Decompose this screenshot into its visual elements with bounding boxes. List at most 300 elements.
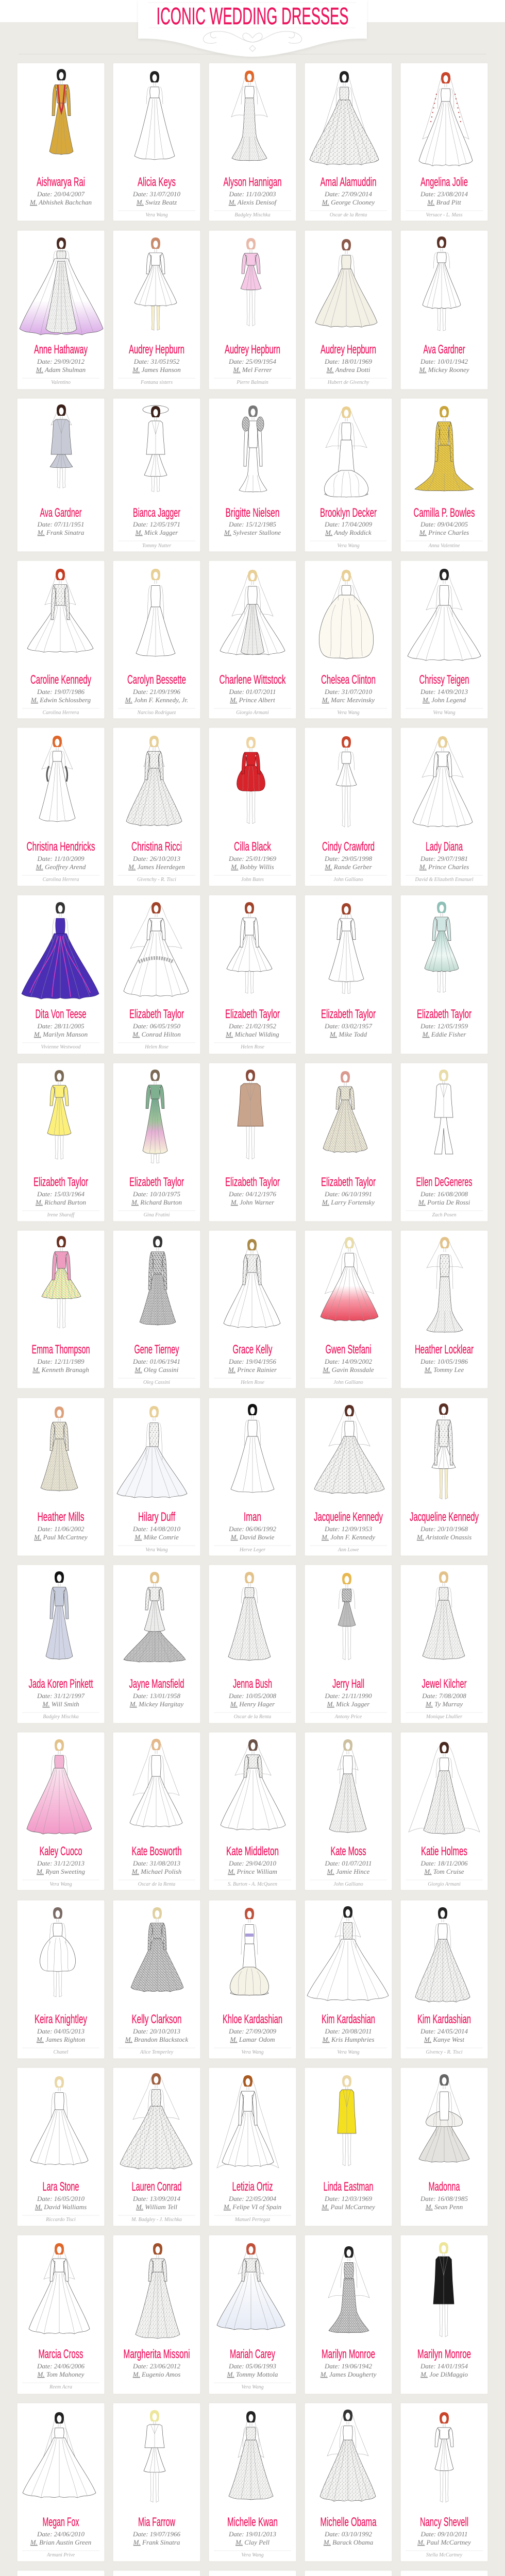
designer: Vera Wang bbox=[433, 710, 456, 716]
icon: dress bbox=[336, 736, 357, 827]
icon: dress bbox=[409, 1742, 480, 1834]
card: Kelly Clarkson bbox=[113, 1900, 200, 2059]
card: Amal Alamuddin bbox=[305, 63, 392, 221]
name: Brooklyn Decker bbox=[320, 506, 377, 520]
icon: dress bbox=[315, 239, 377, 327]
spouse: M. Tommy Mottola bbox=[227, 2370, 278, 2378]
card: Emma Thompson bbox=[17, 1230, 105, 1388]
card: Lauren Conrad bbox=[113, 2067, 200, 2226]
card: Michelle Kwan bbox=[209, 2403, 296, 2562]
spouse: M. Andrea Dotti bbox=[326, 366, 371, 374]
card: Bianca Jagger bbox=[113, 398, 200, 552]
name: Ava Gardner bbox=[424, 343, 465, 357]
date: Date: 28/11/2005 bbox=[37, 1022, 85, 1030]
card: Ava Gardner 1942 bbox=[400, 230, 488, 389]
name: Kate Bosworth bbox=[132, 1844, 181, 1858]
date: Date: 12/11/1989 bbox=[37, 1358, 85, 1365]
name: Lauren Conrad bbox=[132, 2180, 181, 2194]
date: Date: 03/10/1992 bbox=[324, 2530, 373, 2538]
spouse: M. Paul McCartney bbox=[33, 1533, 88, 1541]
designer: Giorgio Armani bbox=[236, 710, 269, 716]
date: Date: 31/07/2010 bbox=[324, 688, 373, 696]
designer: Giorgio Armani bbox=[428, 1882, 461, 1887]
designer: Fontana sisters bbox=[140, 380, 173, 385]
spouse: M. Michael Polish bbox=[131, 1868, 181, 1875]
spouse: M. Frank Sinatra bbox=[133, 2538, 180, 2546]
card: Katie Holmes bbox=[400, 1732, 488, 1890]
date: Date: 20/10/1968 bbox=[420, 1525, 468, 1533]
date: Date: 07/11/1951 bbox=[37, 520, 85, 528]
icon: dress bbox=[221, 1739, 285, 1830]
designer: Armani Prive bbox=[46, 2552, 75, 2558]
name: Gene Tierney bbox=[134, 1343, 179, 1357]
name: Audrey Hepburn bbox=[225, 343, 280, 357]
name: Ava Gardner bbox=[40, 506, 81, 520]
card: Khloe Kardashian bbox=[209, 1900, 296, 2059]
designer: Hubert de Givenchy bbox=[327, 380, 369, 385]
date: Date: 12/05/1971 bbox=[132, 520, 180, 528]
date: Date: 31/08/2013 bbox=[132, 1859, 181, 1867]
card: Lady Diana bbox=[400, 727, 488, 886]
designer: David & Elizabeth Emanuel bbox=[414, 877, 474, 883]
spouse: M. Lamar Odom bbox=[229, 2036, 275, 2043]
date: Date: 25/01/1969 bbox=[228, 855, 277, 862]
card: Dita Von Teese bbox=[17, 895, 105, 1054]
designer: John Bates bbox=[241, 877, 264, 883]
card: Kim Kardashian 2014 bbox=[400, 1900, 488, 2059]
date: Date: 12/03/1969 bbox=[324, 2195, 373, 2202]
name: Madonna bbox=[429, 2180, 460, 2194]
date: Date: 16/08/2008 bbox=[420, 1190, 468, 1198]
card: Kaley Cuoco bbox=[17, 1732, 105, 1890]
spouse: M. Jamie Hince bbox=[327, 1868, 370, 1875]
spouse: M. Abhishek Bachchan bbox=[29, 198, 92, 206]
spouse: M. Mickey Hargitay bbox=[129, 1700, 184, 1708]
card: Michelle Obama bbox=[305, 2403, 392, 2562]
name: Elizabeth Taylor bbox=[33, 1175, 88, 1189]
spouse: M. Brian Austin Green bbox=[30, 2538, 91, 2546]
icon: dress bbox=[120, 2073, 192, 2169]
icon: dress bbox=[423, 1571, 465, 1659]
icon: dress bbox=[49, 69, 73, 155]
spouse: M. James Righton bbox=[36, 2036, 85, 2043]
icon: dress bbox=[136, 2243, 180, 2338]
date: Date: 23/06/2012 bbox=[132, 2362, 181, 2370]
icon: dress bbox=[131, 1907, 183, 1992]
designer: Vera Wang bbox=[337, 2049, 360, 2055]
designer: Versace - L. Mass bbox=[426, 212, 463, 218]
name: Marilyn Monroe bbox=[417, 2347, 471, 2361]
name: Elizabeth Taylor bbox=[129, 1175, 184, 1189]
card: Chrissy Teigen bbox=[400, 561, 488, 719]
name: Bianca Jagger bbox=[133, 506, 180, 520]
icon: dress bbox=[47, 1070, 71, 1159]
icon: dress bbox=[314, 1405, 384, 1494]
name: Gwen Stefani bbox=[326, 1343, 371, 1357]
date: Date: 11/10/2009 bbox=[37, 855, 85, 862]
icon: dress bbox=[434, 1070, 453, 1154]
spouse: M. James Hanson bbox=[132, 366, 181, 374]
name: Christina Ricci bbox=[131, 840, 182, 854]
spouse: M. Adam Shulman bbox=[36, 366, 86, 374]
header divider line bbox=[19, 54, 486, 55]
name: Marilyn Monroe bbox=[322, 2347, 375, 2361]
card: Kate Middleton bbox=[209, 1732, 296, 1890]
card: Caroline Kennedy bbox=[17, 561, 105, 719]
name: Kelly Clarkson bbox=[132, 2012, 181, 2026]
designer: John Galliano bbox=[333, 1380, 363, 1385]
spouse: M. Felipe VI of Spain bbox=[223, 2203, 281, 2211]
date: Date: 24/06/2010 bbox=[37, 2530, 85, 2538]
name: Aishwarya Rai bbox=[37, 175, 85, 189]
designer: Oleg Cassini bbox=[143, 1380, 170, 1385]
date: Date: 19/04/1956 bbox=[228, 1358, 277, 1365]
name: Kim Kardashian bbox=[417, 2012, 471, 2026]
name: Heather Mills bbox=[37, 1510, 85, 1524]
date: Date: 13/09/2014 bbox=[132, 2195, 181, 2202]
name: Letizia Ortiz bbox=[232, 2180, 273, 2194]
name: Caroline Kennedy bbox=[30, 673, 91, 687]
designer: Vivienne Westwood bbox=[41, 1044, 81, 1050]
icon: dress bbox=[29, 2243, 90, 2334]
icon: dress bbox=[117, 1406, 187, 1498]
designer: Givency - R. Tisci bbox=[426, 2049, 463, 2055]
icon: dress bbox=[324, 406, 368, 497]
spouse: M. Barack Obama bbox=[323, 2538, 374, 2546]
card: Christina Ricci bbox=[113, 727, 200, 886]
date: Date: 15/12/1985 bbox=[228, 520, 277, 528]
card: Jewel Kilcher bbox=[400, 1565, 488, 1723]
date: Date: 29/04/2010 bbox=[228, 1859, 277, 1867]
designer: Pierre Balmain bbox=[236, 380, 268, 385]
designer: Helen Rose bbox=[240, 1380, 264, 1385]
spouse: M. Geoffrey Arend bbox=[36, 863, 86, 871]
icon: dress bbox=[136, 569, 175, 656]
name: Chrissy Teigen bbox=[419, 673, 469, 687]
spouse: M. Will Smith bbox=[42, 1700, 79, 1708]
icon: dress bbox=[228, 1572, 271, 1660]
name: Cindy Crawford bbox=[322, 840, 375, 854]
name: Audrey Hepburn bbox=[321, 343, 376, 357]
spouse: M. Kris Humphries bbox=[322, 2036, 374, 2043]
designer: Vera Wang bbox=[241, 2552, 264, 2558]
date: Date: 06/05/1950 bbox=[132, 1022, 181, 1030]
card: Linda Eastman bbox=[305, 2067, 392, 2226]
card: Cindy Crawford bbox=[305, 727, 392, 886]
spouse: M. Mel Ferrer bbox=[233, 366, 272, 374]
icon: dress bbox=[415, 406, 474, 491]
icon: dress bbox=[224, 1239, 280, 1328]
icon: dress bbox=[124, 902, 189, 996]
name: Khloe Kardashian bbox=[223, 2012, 282, 2026]
icon: dress bbox=[237, 737, 265, 824]
name: Jacqueline Kennedy bbox=[314, 1510, 383, 1524]
spouse: M. Brandon Blackstock bbox=[125, 2036, 188, 2043]
spouse: M. John Warner bbox=[230, 1198, 275, 1206]
name: Elizabeth Taylor bbox=[129, 1007, 184, 1021]
name: Lara Stone bbox=[42, 2180, 79, 2194]
card: Elizabeth Taylor 1991 bbox=[305, 1063, 392, 1222]
card: Audrey Hepburn 1969 bbox=[305, 230, 392, 389]
name: Anne Hathaway bbox=[34, 343, 88, 357]
icon: dress bbox=[230, 1908, 269, 1995]
spouse: M. Ty Murray bbox=[425, 1700, 463, 1708]
date: Date: 10/01/1942 bbox=[420, 358, 468, 365]
name: Elizabeth Taylor bbox=[321, 1175, 376, 1189]
card: Cilla Black bbox=[209, 727, 296, 886]
card: Jerry Hall bbox=[305, 1565, 392, 1723]
designer: Helen Rose bbox=[240, 1044, 264, 1050]
header banner bbox=[138, 0, 367, 57]
spouse: M. Tom Mahoney bbox=[37, 2370, 85, 2378]
name: Elizabeth Taylor bbox=[417, 1007, 472, 1021]
designer: Carolina Herrera bbox=[43, 710, 79, 716]
card: Elizabeth Taylor 1959 bbox=[400, 895, 488, 1054]
white top band bbox=[0, 0, 505, 22]
name: Jayne Mansfield bbox=[129, 1677, 184, 1691]
designer: Helen Rose bbox=[144, 1044, 169, 1050]
card: Mia Farrow bbox=[113, 2403, 200, 2562]
name: Marcia Cross bbox=[38, 2347, 83, 2361]
card: Alyson Hannigan bbox=[209, 63, 296, 221]
icon: dress bbox=[338, 1573, 356, 1660]
card: Marilyn Monroe 1954 bbox=[400, 2235, 488, 2394]
icon: dress bbox=[425, 902, 459, 992]
icon: dress bbox=[239, 405, 267, 492]
card: Jayne Mansfield bbox=[113, 1565, 200, 1723]
name: Megan Fox bbox=[42, 2515, 79, 2529]
spouse: M. Paul McCartney bbox=[417, 2538, 471, 2546]
name: Keira Knightley bbox=[35, 2012, 87, 2026]
icon: dress bbox=[39, 736, 75, 822]
spouse: M. Ryan Sweeting bbox=[36, 1868, 85, 1875]
designer: Manuel Pertegaz bbox=[234, 2217, 270, 2223]
designer: John Galliano bbox=[333, 877, 363, 883]
date: Date: 09/04/2005 bbox=[420, 520, 468, 528]
spouse: M. John F. Kennedy bbox=[321, 1533, 375, 1541]
card: Kate Bosworth bbox=[113, 1732, 200, 1890]
card: Iman bbox=[209, 1398, 296, 1556]
name: Amal Alamuddin bbox=[321, 175, 376, 189]
name: Elizabeth Taylor bbox=[225, 1175, 280, 1189]
spouse: M. Tom Cruise bbox=[424, 1868, 464, 1875]
spouse: M. Richard Burton bbox=[35, 1198, 86, 1206]
date: Date: 03/02/1957 bbox=[324, 1022, 373, 1030]
designer: Anna Valentine bbox=[428, 543, 460, 549]
designer: M. Badgley - J. Mischka bbox=[131, 2217, 182, 2223]
date: Date: 31/07/2010 bbox=[132, 190, 181, 198]
name: Audrey Hepburn bbox=[129, 343, 184, 357]
card: Keira Knightley bbox=[17, 1900, 105, 2059]
spouse: M. William Tell bbox=[136, 2203, 177, 2211]
spouse: M. Sylvester Stallone bbox=[224, 529, 281, 536]
card: Kate Moss bbox=[305, 1732, 392, 1890]
date: Date: 12/09/1953 bbox=[324, 1525, 373, 1533]
icon: dress bbox=[20, 238, 103, 335]
date: Date: 12/05/1959 bbox=[420, 1022, 468, 1030]
date: Date: 29/05/1998 bbox=[324, 855, 373, 862]
designer: Vera Wang bbox=[241, 2384, 264, 2390]
icon: dress bbox=[220, 570, 285, 655]
spouse: M. Frank Sinatra bbox=[37, 529, 85, 536]
spouse: M. Rande Gerber bbox=[324, 863, 373, 871]
designer: Alice Temperley bbox=[140, 2049, 174, 2055]
date: Date: 14/09/2013 bbox=[420, 688, 468, 696]
card: Elizabeth Taylor 1952 bbox=[209, 895, 296, 1054]
designer: Monique Lhullier bbox=[426, 1714, 462, 1720]
designer: Zach Posen bbox=[432, 1212, 456, 1218]
designer: Givenchy - R. Tisci bbox=[137, 877, 176, 883]
card: Gene Tierney bbox=[113, 1230, 200, 1388]
card: Hilary Duff bbox=[113, 1398, 200, 1556]
icon: dress bbox=[231, 1404, 274, 1493]
card: Jenna Bush bbox=[209, 1565, 296, 1723]
spouse: M. Brad Pitt bbox=[427, 198, 461, 206]
name: Linda Eastman bbox=[324, 2180, 373, 2194]
icon: dress bbox=[419, 2074, 469, 2162]
spouse: M. Prince Charles bbox=[419, 863, 469, 871]
spouse: M. Richard Burton bbox=[131, 1198, 182, 1206]
card: Olivia Palermo bbox=[209, 2570, 296, 2576]
icon: dress bbox=[46, 1571, 73, 1659]
name: Christina Hendricks bbox=[27, 840, 95, 854]
spouse: M. Sean Penn bbox=[425, 2203, 463, 2211]
name: Jenna Bush bbox=[233, 1677, 272, 1691]
spouse: M. Joe DiMaggio bbox=[420, 2370, 468, 2378]
spouse: M. Mike Todd bbox=[329, 1030, 367, 1038]
date: Date: 09/10/2011 bbox=[420, 2530, 468, 2538]
designer: Valentino bbox=[51, 380, 71, 385]
date: Date: 16/05/2010 bbox=[37, 2195, 85, 2202]
name: Angelina Jolie bbox=[420, 175, 468, 189]
designer: Stella McCartney bbox=[426, 2552, 463, 2558]
date: Date: 31/12/1997 bbox=[37, 1692, 85, 1700]
icon: dress bbox=[319, 570, 374, 659]
card: Jada Koren Pinkett bbox=[17, 1565, 105, 1723]
spouse: M. Marilyn Manson bbox=[33, 1030, 88, 1038]
date: Date: 24/05/2014 bbox=[420, 2027, 468, 2035]
designer: Vera Wang bbox=[49, 1882, 72, 1887]
date: Date: 19/07/1966 bbox=[132, 2530, 181, 2538]
date: Date: 20/10/2013 bbox=[132, 2027, 181, 2035]
spouse: M. Eugenio Amos bbox=[132, 2370, 180, 2378]
name: Elizabeth Taylor bbox=[225, 1007, 280, 1021]
spouse: M. Mick Jagger bbox=[135, 529, 178, 536]
icon: dress bbox=[310, 71, 379, 165]
date: Date: 06/10/1991 bbox=[324, 1190, 372, 1198]
spouse: M. John F. Kennedy, Jr. bbox=[125, 696, 188, 704]
designer: Vera Wang bbox=[145, 212, 168, 218]
spouse: M. David Bowie bbox=[230, 1533, 275, 1541]
date: Date: 29/09/2012 bbox=[37, 358, 85, 365]
card: Camilla P. Bowles bbox=[400, 398, 488, 552]
name: Kaley Cuoco bbox=[39, 1844, 82, 1858]
date: Date: 14/09/2002 bbox=[324, 1358, 373, 1365]
icon: dress bbox=[27, 1739, 92, 1834]
date: Date: 31/12/2013 bbox=[37, 1859, 85, 1867]
designer: Reem Acra bbox=[49, 2384, 72, 2390]
ornament: flourish bbox=[203, 31, 302, 52]
card: Heather Mills bbox=[17, 1398, 105, 1556]
card: Heather Locklear bbox=[400, 1230, 488, 1388]
card: Margherita Missoni bbox=[113, 2235, 200, 2394]
date: Date: 24/06/2006 bbox=[37, 2362, 85, 2370]
card: Ellen DeGeneres bbox=[400, 1063, 488, 1222]
icon: dress bbox=[217, 2243, 285, 2330]
name: Mariah Carey bbox=[230, 2347, 275, 2361]
designer: Ann Lowe bbox=[338, 1547, 359, 1553]
icon: dress bbox=[432, 1403, 456, 1499]
name: Emma Thompson bbox=[32, 1343, 90, 1357]
card: Christina Hendricks bbox=[17, 727, 105, 886]
designer: Oscar de la Renta bbox=[138, 1882, 175, 1887]
name: Jada Koren Pinkett bbox=[29, 1677, 93, 1691]
name: Michelle Obama bbox=[321, 2515, 377, 2529]
designer: John Galliano bbox=[333, 1882, 363, 1887]
spouse: M. David Walliams bbox=[35, 2203, 87, 2211]
date: Date: 19/07/1986 bbox=[37, 688, 85, 696]
date: Date: 21/09/1996 bbox=[132, 688, 181, 696]
spouse: M. Gavin Rossdale bbox=[322, 1366, 374, 1374]
card: Alicia Keys bbox=[113, 63, 200, 221]
date: Date: 04/12/1976 bbox=[228, 1190, 277, 1198]
spouse: M. Aristotle Onassis bbox=[416, 1533, 472, 1541]
designer: Carolina Herrera bbox=[43, 877, 79, 883]
card: Letizia Ortiz bbox=[209, 2067, 296, 2226]
spouse: M. Alexis Denisof bbox=[228, 198, 278, 206]
icon: dress bbox=[27, 569, 93, 652]
date: Date: 14/08/2010 bbox=[132, 1525, 181, 1533]
card: Angelina Jolie bbox=[400, 63, 488, 221]
name: Brigitte Nielsen bbox=[226, 506, 279, 520]
card: Gwen Stefani bbox=[305, 1230, 392, 1388]
icon: dress bbox=[23, 2412, 96, 2498]
card: Aishwarya Rai bbox=[17, 63, 105, 221]
date: Date: 21/02/1952 bbox=[228, 1022, 277, 1030]
designer: Irene Sharaff bbox=[47, 1212, 75, 1218]
date: Date: 01/07/2011 bbox=[228, 688, 276, 696]
icon: dress bbox=[134, 71, 175, 160]
date: Date: 18/11/2006 bbox=[420, 1859, 468, 1867]
spouse: M. John Legend bbox=[422, 696, 466, 704]
spouse: M. Andy Roddick bbox=[325, 529, 372, 536]
icon: dress bbox=[41, 1406, 78, 1491]
icon: dress bbox=[328, 2246, 369, 2333]
spouse: M. James Dougherty bbox=[320, 2370, 377, 2378]
icon: dress bbox=[217, 2075, 279, 2168]
spouse: M. Prince Albert bbox=[229, 696, 275, 704]
card: Ava Gardner 1951 bbox=[17, 398, 105, 552]
date: Date: 26/10/2013 bbox=[132, 855, 181, 862]
card: Brigitte Nielsen bbox=[209, 398, 296, 552]
spouse: M. Mickey Rooney bbox=[418, 366, 469, 374]
card: Kim Kardashian 2011 bbox=[305, 1900, 392, 2059]
card: Madonna bbox=[400, 2067, 488, 2226]
icon: dress bbox=[427, 1237, 463, 1332]
card: Elizabeth Taylor 1964 bbox=[17, 1063, 105, 1222]
card: Chelsea Clinton bbox=[305, 561, 392, 719]
name: Nancy Shevell bbox=[420, 2515, 468, 2529]
icon: dress bbox=[433, 2242, 454, 2337]
name: Carolyn Bessette bbox=[127, 673, 186, 687]
card: Elizabeth Taylor 1976 bbox=[209, 1063, 296, 1222]
designer: Tommy Nutter bbox=[142, 543, 171, 549]
date: Date: 20/08/2011 bbox=[324, 2027, 372, 2035]
date: Date: 17/04/2009 bbox=[324, 520, 373, 528]
icon: dress bbox=[144, 2410, 165, 2502]
designer: Badgley Mischka bbox=[43, 1714, 79, 1720]
name: Iman bbox=[244, 1510, 261, 1524]
